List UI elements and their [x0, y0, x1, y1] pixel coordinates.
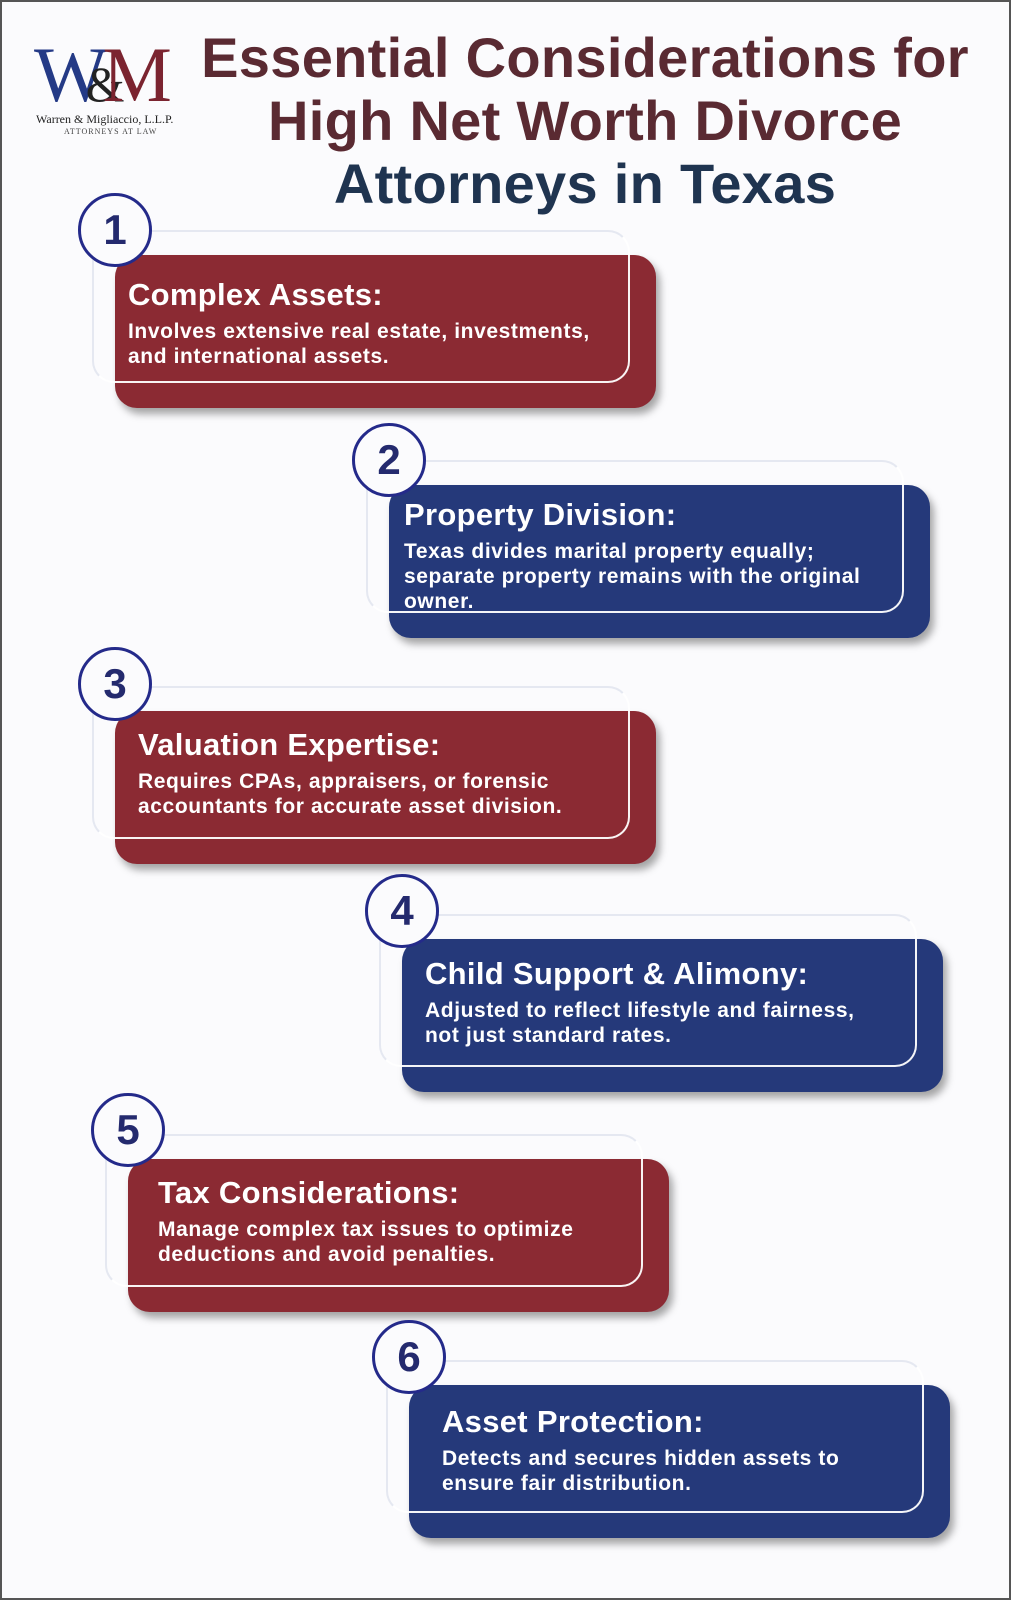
number 6: 6: [397, 1333, 421, 1380]
panel 1: [78, 193, 665, 419]
text 2: owner.: [404, 590, 474, 613]
text 5: [158, 1175, 573, 1266]
panel 5: [91, 1093, 678, 1323]
number 1: [78, 193, 152, 267]
text 4: Adjusted to reflect lifestyle and fairness,: [425, 999, 855, 1022]
number 4: [365, 874, 439, 948]
logo: Warren & Migliaccio, L.L.P.: [36, 112, 173, 126]
number 6: [372, 1320, 446, 1394]
number 1: 1: [103, 206, 127, 253]
number 3: 3: [103, 660, 127, 707]
text 6: Detects and secures hidden assets to: [442, 1447, 839, 1470]
text 1: [128, 277, 590, 368]
text 6: ensure fair distribution.: [442, 1472, 692, 1495]
text 3: [138, 727, 562, 818]
number 2: 2: [377, 436, 401, 483]
title: Essential Considerations for: [201, 26, 969, 89]
panel 3: [78, 647, 665, 875]
text 2: separate property remains with the original: [404, 565, 860, 588]
number 5: 5: [116, 1106, 140, 1153]
text 4: Child Support & Alimony:: [425, 956, 808, 991]
text 1: and international assets.: [128, 345, 389, 368]
text 2: [404, 497, 860, 613]
number 4: 4: [390, 887, 414, 934]
text 5: Manage complex tax issues to optimize: [158, 1218, 573, 1241]
text 3: Valuation Expertise:: [138, 727, 440, 762]
text 4: not just standard rates.: [425, 1024, 672, 1047]
text 2: Texas divides marital property equally;: [404, 540, 814, 563]
title: [201, 26, 969, 215]
title: High Net Worth Divorce: [268, 89, 902, 152]
number 5: [91, 1093, 165, 1167]
panel 4: [365, 874, 952, 1103]
text 3: accountants for accurate asset division.: [138, 795, 562, 818]
text 5: deductions and avoid penalties.: [158, 1243, 495, 1266]
text 4: [425, 956, 855, 1047]
text 3: Requires CPAs, appraisers, or forensic: [138, 770, 549, 793]
text 6: Asset Protection:: [442, 1404, 704, 1439]
number 2: [352, 423, 426, 497]
text 1: Complex Assets:: [128, 277, 383, 312]
text 6: [442, 1404, 839, 1495]
logo: ATTORNEYS AT LAW: [64, 127, 157, 136]
panel 6: [372, 1320, 959, 1549]
logo: [34, 31, 173, 136]
panel 2: [352, 423, 939, 649]
logo: W&M: [34, 31, 150, 118]
text 5: Tax Considerations:: [158, 1175, 459, 1210]
title: Attorneys in Texas: [334, 152, 836, 215]
text 2: Property Division:: [404, 497, 676, 532]
text 1: Involves extensive real estate, investments,: [128, 320, 590, 343]
number 3: [78, 647, 152, 721]
